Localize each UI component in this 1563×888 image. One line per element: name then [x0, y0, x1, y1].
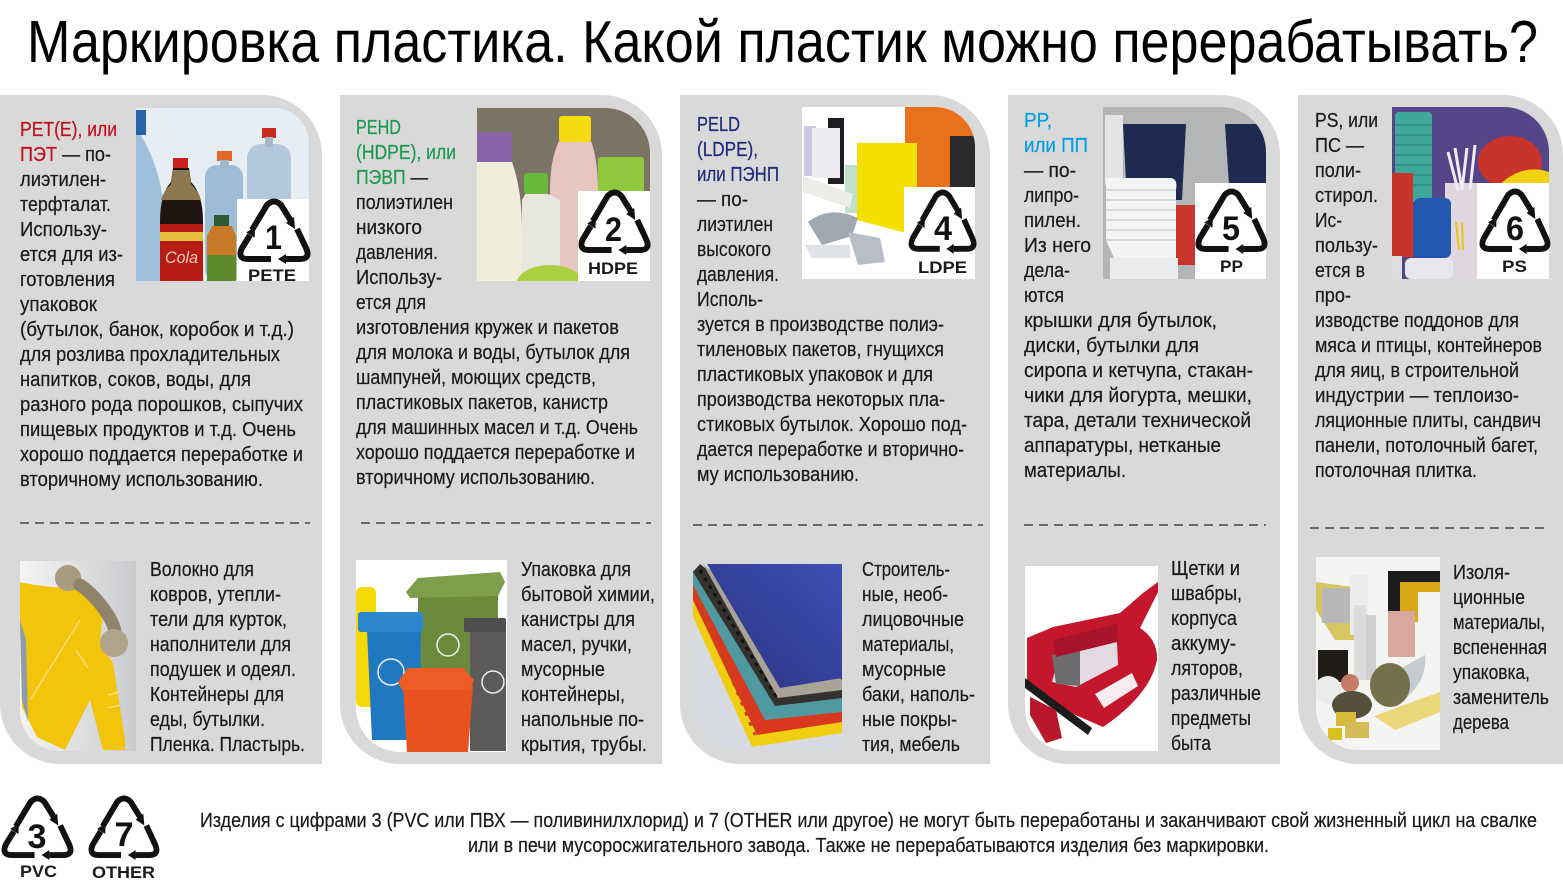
description: PET: [20, 118, 304, 491]
uses: LDPE: ные покры-: [862, 708, 957, 731]
description: HDPE: изготовления кружек и пакетов: [356, 316, 619, 339]
symbol: recycling code 1 PETE: [237, 199, 309, 285]
description: PET: упаковок: [20, 293, 98, 316]
photo: PET bottles: [136, 108, 309, 281]
description: PS: панели, потолочный багет,: [1315, 434, 1538, 457]
description: HDPE: давления.: [356, 241, 438, 264]
uses: PET: Контейнеры для: [150, 683, 284, 706]
panel: HDPE: [340, 95, 662, 764]
photo: PET bottles: Cola: [165, 248, 198, 267]
symbol: recycling code 2 HDPE: 2: [605, 211, 622, 249]
symbol: recycling code 1 PETE: 1: [265, 219, 282, 257]
uses: PP: Щетки и: [1171, 557, 1240, 580]
description: PET: ПЭТ — по-: [20, 143, 111, 166]
description: PS: индустрии — теплоизо-: [1315, 384, 1519, 407]
uses: PET: Пленка. Пластырь.: [150, 733, 305, 756]
description: LDPE: PELD: [697, 113, 740, 136]
symbol: recycling code 6 PS: PS: [1502, 257, 1527, 276]
description: HDPE: полиэтилен: [356, 191, 453, 214]
uses: HDPE: [521, 558, 655, 756]
symbol: recycling code 7 OTHER: [91, 798, 157, 882]
uses: LDPE: тия, мебель: [862, 733, 960, 756]
uses: PS: материалы,: [1453, 611, 1545, 634]
description: PET: для розлива прохладительных: [20, 343, 281, 366]
photo: PS cups and plates: [1392, 107, 1549, 279]
description: PS: потолочная плитка.: [1315, 459, 1477, 482]
description: PP: Из него: [1024, 234, 1091, 257]
uses: PP: швабры,: [1171, 582, 1242, 605]
uses: HDPE: контейнеры,: [521, 683, 625, 706]
uses: HDPE: масел, ручки,: [521, 633, 632, 656]
description: HDPE: для молока и воды, бутылок для: [356, 341, 630, 364]
uses: LDPE: лицовочные: [862, 608, 964, 631]
uses: HDPE: канистры для: [521, 608, 635, 631]
uses: PS: [1453, 561, 1549, 734]
description: HDPE: пластиковых пакетов, канистр: [356, 391, 608, 414]
description: PET: разного рода порошков, сыпучих: [20, 393, 304, 416]
description: LDPE: стиковых бутылок. Хорошо под-: [697, 413, 967, 436]
uses: LDPE: материалы,: [862, 633, 954, 656]
uses: LDPE: баки, наполь-: [862, 683, 975, 706]
symbol: recycling code 4 LDPE: LDPE: [918, 258, 967, 277]
symbol: recycling code 2 HDPE: [578, 191, 650, 281]
description: PET: вторичному использованию.: [20, 468, 263, 491]
uses: LDPE: мусорные: [862, 658, 946, 681]
symbol: recycling code 3 PVC: PVC: [20, 862, 57, 881]
description: PP: материалы.: [1024, 459, 1126, 482]
uses: HDPE: крытия, трубы.: [521, 733, 647, 756]
uses: PP: аккуму-: [1171, 632, 1236, 655]
uses: PS: вспененная: [1453, 636, 1547, 659]
symbol: recycling code 3 PVC: [4, 798, 71, 881]
uses: LDPE: [862, 558, 975, 756]
description: PS: [1315, 109, 1542, 482]
description: LDPE: Исполь-: [697, 288, 763, 311]
photo: red dustpan and brush: [1025, 566, 1158, 751]
description: PP: — по-: [1024, 159, 1076, 182]
description: PET: терфталат.: [20, 193, 111, 216]
description: LDPE: тиленовых пакетов, гнущихся: [697, 338, 944, 361]
footnote: или в печи мусоросжигательного завода. Также не перерабатываются изделия без маркировки.: [468, 834, 1269, 857]
description: LDPE: высокого: [697, 238, 771, 261]
description: PS: для яиц, в строительной: [1315, 359, 1519, 382]
description: PP: [1024, 109, 1253, 482]
description: PS: пользу-: [1315, 234, 1378, 257]
uses: HDPE: мусорные: [521, 658, 605, 681]
uses: PET: еды, бутылки.: [150, 708, 265, 731]
description: PS: ется в: [1315, 259, 1365, 282]
description: LDPE: лиэтилен: [697, 213, 773, 236]
description: HDPE: [356, 116, 638, 489]
description: PET: напитков, соков, воды, для: [20, 368, 251, 391]
uses: PET: тели для курток,: [150, 608, 287, 631]
description: LDPE: [697, 113, 967, 486]
uses: PP: корпуса: [1171, 607, 1238, 630]
description: LDPE: или ПЭНП: [697, 163, 779, 186]
description: HDPE: для машинных масел и т.д. Очень: [356, 416, 638, 439]
description: PS: Ис-: [1315, 209, 1342, 232]
uses: PS: Изоля-: [1453, 561, 1510, 584]
description: HDPE: ПЭВП —: [356, 166, 428, 189]
panel: PET: [0, 95, 322, 764]
description: PP: крышки для бутылок,: [1024, 309, 1217, 332]
symbol: recycling code 4 LDPE: [904, 187, 975, 279]
symbol: recycling code 5 PP: [1195, 183, 1266, 279]
photo: insulation materials: [1314, 557, 1440, 750]
photo: LDPE bags and film: [802, 107, 975, 279]
description: HDPE: вторичному использованию.: [356, 466, 595, 489]
photo: PP containers: [1103, 107, 1266, 279]
footnote: [200, 809, 1537, 857]
description: PET: хорошо поддается переработке и: [20, 443, 303, 466]
uses: PP: [1171, 557, 1261, 755]
uses: PET: ковров, утепли-: [150, 583, 281, 606]
description: PP: сиропа и кетчупа, стакан-: [1024, 359, 1253, 382]
description: HDPE: Использу-: [356, 266, 442, 289]
photo: floor mats: [693, 564, 842, 750]
uses: PET: Волокно для: [150, 558, 254, 581]
panel: PP: [1008, 95, 1280, 764]
description: PET: лиэтилен-: [20, 168, 106, 191]
description: PS: PS, или: [1315, 109, 1378, 132]
description: HDPE: (HDPE), или: [356, 141, 456, 164]
description: PET: Использу-: [20, 218, 107, 241]
uses: PET: [150, 558, 305, 756]
description: LDPE: му использованию.: [697, 463, 859, 486]
description: PP: диски, бутылки для: [1024, 334, 1199, 357]
symbol: recycling code 5 PP: PP: [1220, 257, 1243, 276]
uses: PS: дерева: [1453, 711, 1509, 734]
description: PP: пилен.: [1024, 209, 1081, 232]
description: HDPE: PEHD: [356, 116, 401, 139]
uses: PS: заменитель: [1453, 686, 1549, 709]
symbol: recycling code 4 LDPE: 4: [934, 210, 952, 248]
photo: yellow jacket: [19, 561, 136, 751]
uses: HDPE: Упаковка для: [521, 558, 631, 581]
description: HDPE: хорошо поддается переработке и: [356, 441, 635, 464]
symbol: recycling code 6 PS: [1477, 183, 1549, 279]
uses: PS: упаковка,: [1453, 661, 1530, 684]
symbol: recycling code 5 PP: 5: [1222, 210, 1240, 248]
uses: HDPE: напольные по-: [521, 708, 644, 731]
description: LDPE: — по-: [697, 188, 748, 211]
description: PP: ются: [1024, 284, 1064, 307]
description: PS: поли-: [1315, 159, 1361, 182]
description: HDPE: шампуней, моющих средств,: [356, 366, 596, 389]
description: PP: дела-: [1024, 259, 1070, 282]
description: PP: PP,: [1024, 109, 1052, 132]
description: PS: ПС —: [1315, 134, 1364, 157]
uses: LDPE: ные, необ-: [862, 583, 948, 606]
symbol: recycling code 1 PETE: PETE: [248, 266, 296, 285]
description: LDPE: (LDPE),: [697, 138, 758, 161]
description: PP: чики для йогурта, мешки,: [1024, 384, 1252, 407]
symbol: recycling code 7 OTHER: OTHER: [92, 863, 155, 882]
panel: LDPE: [680, 95, 990, 764]
uses: PP: предметы: [1171, 707, 1251, 730]
description: LDPE: зуется в производстве полиэ-: [697, 313, 944, 336]
description: LDPE: пластиковых упаковок и для: [697, 363, 933, 386]
description: PET: (бутылок, банок, коробок и т.д.): [20, 318, 294, 341]
description: LDPE: производства некоторых пла-: [697, 388, 945, 411]
uses: PS: ционные: [1453, 586, 1525, 609]
description: PET: РЕТ(Е), или: [20, 118, 117, 141]
description: PP: липро-: [1024, 184, 1079, 207]
description: PET: пищевых продуктов и т.д. Очень: [20, 418, 296, 441]
description: HDPE: ется для: [356, 291, 426, 314]
uses: LDPE: Строитель-: [862, 558, 950, 581]
description: PS: изводстве поддонов для: [1315, 309, 1519, 332]
description: PP: тара, детали технической: [1024, 409, 1251, 432]
symbol: recycling code 7 OTHER: 7: [114, 816, 134, 854]
photo: waste bins: [356, 560, 507, 752]
uses: PP: различные: [1171, 682, 1261, 705]
description: LDPE: дается переработке и вторично-: [697, 438, 964, 461]
description: HDPE: низкого: [356, 216, 422, 239]
description: PS: стирол.: [1315, 184, 1378, 207]
description: PET: ется для из-: [20, 243, 123, 266]
symbol: recycling code 6 PS: 6: [1506, 210, 1524, 248]
panel: PS: [1298, 95, 1563, 764]
photo: HDPE bottles: [477, 108, 650, 281]
description: PS: про-: [1315, 284, 1351, 307]
description: PP: или ПП: [1024, 134, 1088, 157]
uses: HDPE: бытовой химии,: [521, 583, 655, 606]
symbol: recycling code 2 HDPE: HDPE: [588, 259, 638, 278]
description: PP: аппаратуры, нетканые: [1024, 434, 1221, 457]
uses: PP: ляторов,: [1171, 657, 1243, 680]
description: LDPE: давления.: [697, 263, 779, 286]
symbol: recycling code 3 PVC: 3: [28, 818, 46, 856]
uses: PET: наполнители для: [150, 633, 291, 656]
uses: PET: подушек и одеял.: [150, 658, 296, 681]
description: PET: готовления: [20, 268, 115, 291]
uses: PP: быта: [1171, 732, 1211, 755]
